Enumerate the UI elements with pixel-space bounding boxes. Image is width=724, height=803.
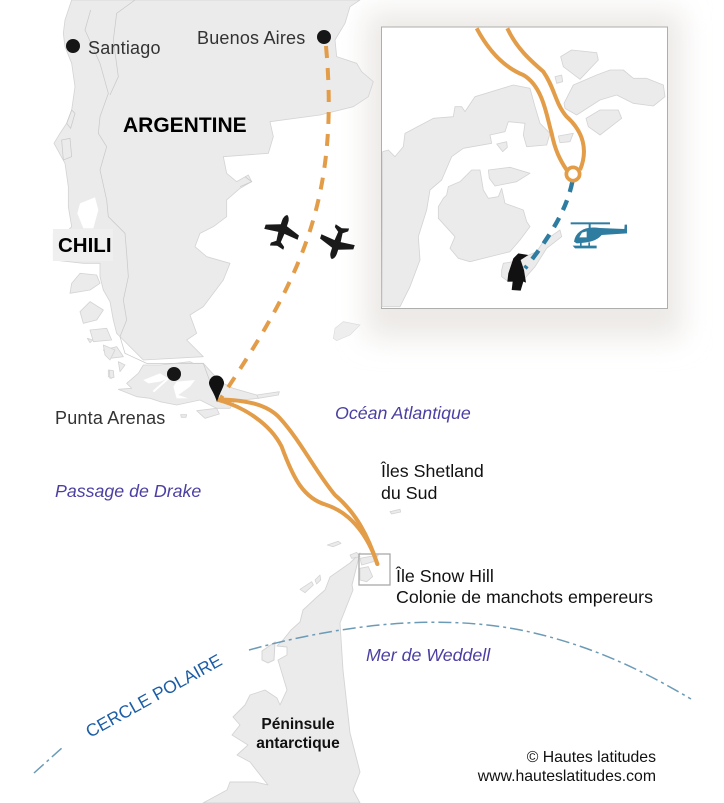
label: Péninsule antarctique: Péninsule [261,716,335,733]
map: South America [53,0,373,418]
flight route [221,46,329,398]
water: inland channel [77,197,98,228]
routes: inset [477,28,584,170]
title: CHILI: CHILI [58,234,112,257]
label: Mer de Weddell: Mer de Weddell [366,645,491,665]
label: Snow Hill: Île Snow Hill [396,566,494,586]
sea routes [218,399,377,564]
land: Falkland islands [333,322,360,341]
label: ARGENTINE: ARGENTINE [123,114,247,137]
land: west peninsula islet [262,642,275,663]
marker: Punta Arenas: Punta Arenas [55,408,165,428]
helicopter route [525,182,572,268]
label: Snow Hill: Colonie de manchots empereurs [396,587,653,607]
map: Antarctic peninsula [203,509,401,803]
label: CERCLE POLAIRE: CERCLE POLAIRE [82,650,225,741]
land: Tierra del Fuego area [103,345,258,418]
polar circle line [34,622,691,773]
label: Océan Atlantique: Océan Atlantique [335,403,471,423]
inset glow [366,12,682,338]
land: inset west mainland [382,85,550,307]
marker: Ushuaia pin [209,376,224,402]
land: peninsula outline [203,553,360,803]
label: Shetland: du Sud [381,483,437,503]
marker: Santiago: Santiago [88,38,161,58]
land: small islands [300,509,401,593]
icon: penguin [507,253,528,291]
label: Péninsule antarctique: antarctique [256,735,340,752]
icon: plane left [260,209,304,253]
marker: Punta Arenas [55,367,181,428]
land: inset small islands [488,50,665,186]
icon: plane right [315,221,359,265]
panel: inset map [382,27,668,308]
land: western islands [70,273,279,398]
label: Shetland: Îles Shetland [381,461,484,481]
label: Passage de Drake: Passage de Drake [55,481,201,501]
marker: Buenos Aires: Buenos Aires [197,28,305,48]
land: inset James Ross island [438,170,530,262]
credit: © Hautes latitudes [527,749,656,766]
land: mainland [53,0,373,360]
zoom box [359,554,390,585]
title: CHILI [53,229,113,261]
land: inset Snow Hill island [502,230,562,282]
icon: helicopter [571,222,627,248]
borders [62,0,252,400]
credit: www.hauteslatitudes.com [477,768,656,785]
marker: inset ring [566,167,580,181]
